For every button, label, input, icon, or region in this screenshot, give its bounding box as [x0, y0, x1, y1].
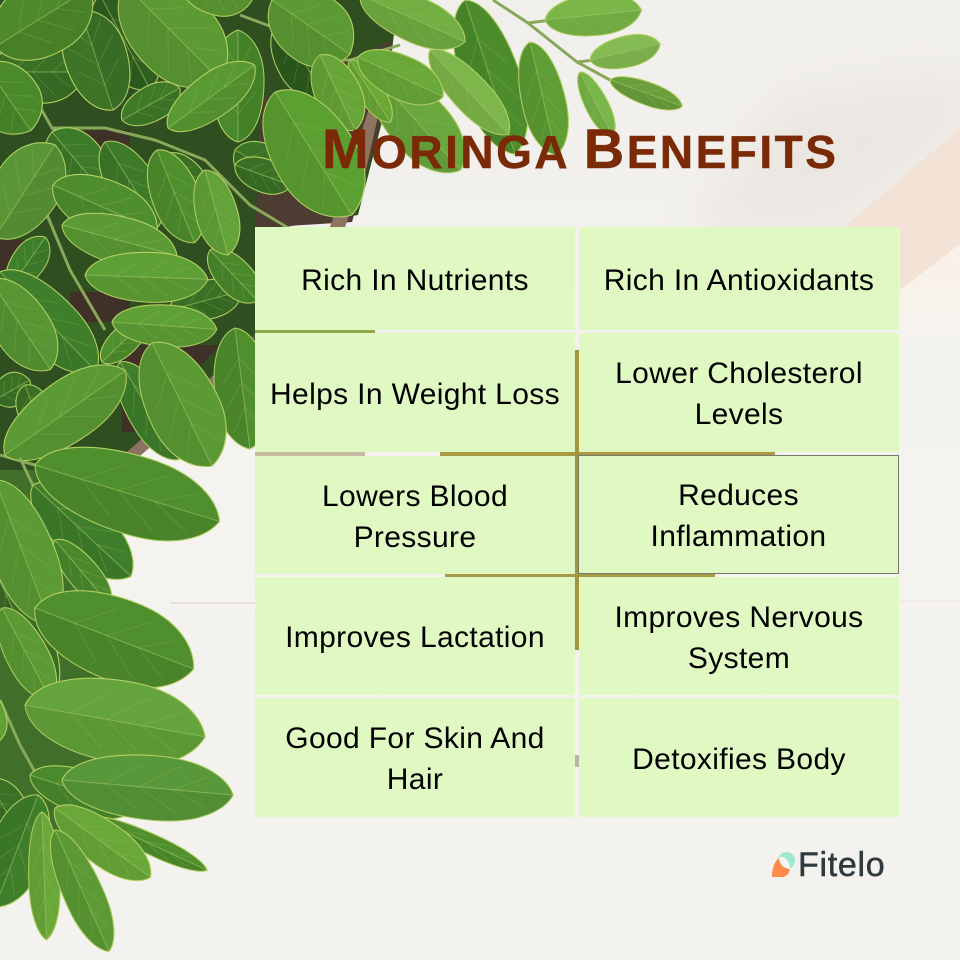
leaves: lower left cluster	[0, 427, 236, 960]
cell: helps in weight loss	[255, 333, 575, 452]
cell: lowers blood pressure: Pressure	[354, 520, 476, 554]
cell: rich in nutrients: Rich In Nutrients	[301, 264, 529, 296]
cell: improves lactation	[255, 577, 575, 695]
wooden board corner	[843, 128, 960, 340]
cell: improves lactation: Improves Lactation	[285, 621, 545, 654]
cell: rich in antioxidants	[579, 227, 899, 330]
wooden bowl and dark leaf mass	[0, 0, 398, 900]
stems upper	[0, 0, 610, 465]
cell: helps in weight loss: Helps In Weight Loss	[270, 378, 560, 410]
icon: Fitelo mark	[772, 852, 795, 877]
title: MORINGA BENEFITS	[322, 117, 838, 180]
cell: good for skin and hair: Hair	[387, 763, 443, 796]
cell: rich in nutrients	[255, 227, 575, 330]
cell: improves nervous system	[579, 577, 899, 695]
cell: detoxifies body	[579, 698, 899, 817]
stems lower	[0, 458, 95, 820]
cell: reduces inflammation: Reduces	[678, 479, 799, 512]
cell: lower cholesterol levels: Lower Cholesterol	[615, 357, 863, 390]
gold powder seen through grid gaps	[255, 330, 775, 767]
leaves: back dark layer	[0, 0, 348, 471]
cell: good for skin and hair: Good For Skin And	[285, 722, 545, 755]
cell: detoxifies body: Detoxifies Body	[632, 742, 846, 776]
cell: lower cholesterol levels: Levels	[695, 398, 783, 431]
cell: reduces inflammation: Inflammation	[651, 520, 826, 553]
benefits grid	[255, 227, 899, 817]
cell: rich in antioxidants: Rich In Antioxidants	[604, 264, 874, 296]
cell: reduces inflammation	[578, 455, 899, 574]
cell: lowers blood pressure: Lowers Blood	[322, 480, 508, 512]
cell: improves nervous system: Improves Nervous	[614, 600, 864, 634]
wordmark: Fitelo	[798, 846, 885, 884]
leaves: top centre and right sprigs	[240, 0, 686, 237]
cell: lowers blood pressure	[255, 456, 575, 574]
brand logo: Fitelo	[772, 846, 885, 884]
cell: good for skin and hair	[255, 698, 575, 817]
cell: lower cholesterol levels	[579, 333, 899, 452]
cell: improves nervous system: System	[688, 642, 790, 674]
leaves: top left cluster	[0, 0, 267, 482]
